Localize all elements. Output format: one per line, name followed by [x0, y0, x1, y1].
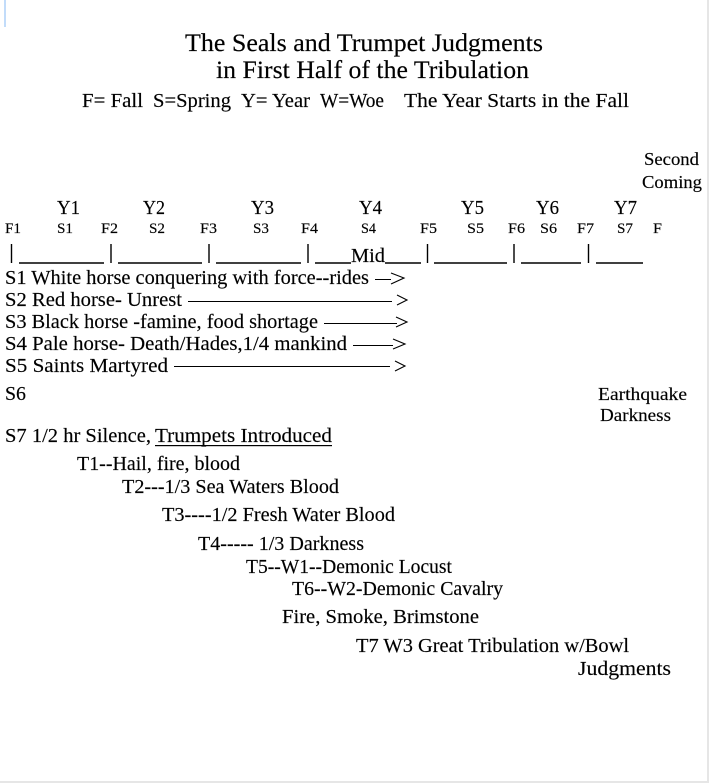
fall and spring labels: S7 [617, 221, 634, 237]
trumpet T2: T2---1/3 Sea Waters Blood [122, 476, 339, 498]
fall and spring labels: F2 [101, 221, 118, 237]
fall and spring labels: F1 [5, 221, 21, 237]
year labels: Y6 [536, 197, 559, 219]
midpoint label: Mid [351, 245, 385, 267]
trumpet T5: T5--W1--Demonic Locust [246, 556, 452, 578]
trumpet T3: T3----1/2 Fresh Water Blood [162, 504, 395, 526]
trumpet T1: T1--Hail, fire, blood [77, 453, 240, 475]
fall and spring labels: F5 [420, 221, 437, 237]
label: earthquake and darkness: Darkness [600, 405, 671, 425]
seal S4: S4 Pale horse- Death/Hades,1/4 mankind [5, 333, 347, 355]
seal S7: Trumpets Introduced [155, 425, 332, 447]
fall and spring labels: F3 [200, 221, 217, 237]
legend: F= Fall [82, 90, 143, 112]
fall and spring labels: S4 [361, 221, 376, 237]
seal S6: S6 [5, 383, 26, 405]
seal S3: S3 Black horse -famine, food shortage [5, 311, 318, 333]
fall and spring labels [5, 221, 662, 237]
trumpet T7 [356, 635, 671, 680]
trumpet T7: Judgments [578, 658, 671, 680]
fall and spring labels: S1 [57, 221, 73, 237]
fall and spring labels: F [653, 221, 662, 237]
trumpet T4: T4----- 1/3 Darkness [198, 533, 364, 555]
legend: S=Spring [153, 90, 231, 112]
year labels: Y3 [251, 197, 274, 219]
label: earthquake and darkness: Earthquake [598, 384, 687, 404]
label: second coming: Coming [642, 172, 702, 192]
fall and spring labels: S5 [467, 221, 484, 237]
title [185, 30, 543, 84]
legend: The Year Starts in the Fall [404, 90, 629, 112]
year labels: Y5 [461, 197, 484, 219]
fall and spring labels: F6 [508, 221, 526, 237]
legend: W=Woe [320, 90, 384, 112]
trumpet T6 detail: Fire, Smoke, Brimstone [282, 606, 479, 628]
year labels: Y7 [614, 197, 637, 219]
fall and spring labels: S3 [253, 221, 269, 237]
legend: Y= Year [241, 90, 310, 112]
seal S5 [5, 355, 405, 377]
year labels: Y1 [57, 197, 80, 219]
label: second coming: Second [644, 149, 699, 169]
title: in First Half of the Tribulation [216, 57, 530, 84]
year labels: Y2 [143, 197, 165, 219]
trumpet T6: T6--W2-Demonic Cavalry [292, 578, 504, 600]
seal S2 [5, 289, 407, 311]
label: second coming [642, 149, 702, 192]
title: The Seals and Trumpet Judgments [185, 30, 543, 57]
fall and spring labels: F7 [577, 221, 595, 237]
trumpet judgments [77, 453, 671, 680]
fall and spring labels: S2 [149, 221, 165, 237]
fall and spring labels: F4 [301, 221, 319, 237]
label: earthquake and darkness [598, 384, 687, 425]
year labels [57, 197, 637, 219]
legend [82, 90, 629, 112]
seal S7: S7 1/2 hr Silence, [5, 425, 151, 447]
seal S7 [5, 425, 332, 447]
year labels: Y4 [359, 197, 382, 219]
timeline [5, 197, 662, 267]
timeline bar [12, 244, 643, 263]
seal S5: S5 Saints Martyred [5, 355, 168, 377]
seal S1: S1 White horse conquering with force--rides [5, 267, 369, 289]
fall and spring labels: S6 [540, 221, 558, 237]
seal S2: S2 Red horse- Unrest [5, 289, 182, 311]
trumpet T7: T7 W3 Great Tribulation w/Bowl [356, 635, 629, 657]
